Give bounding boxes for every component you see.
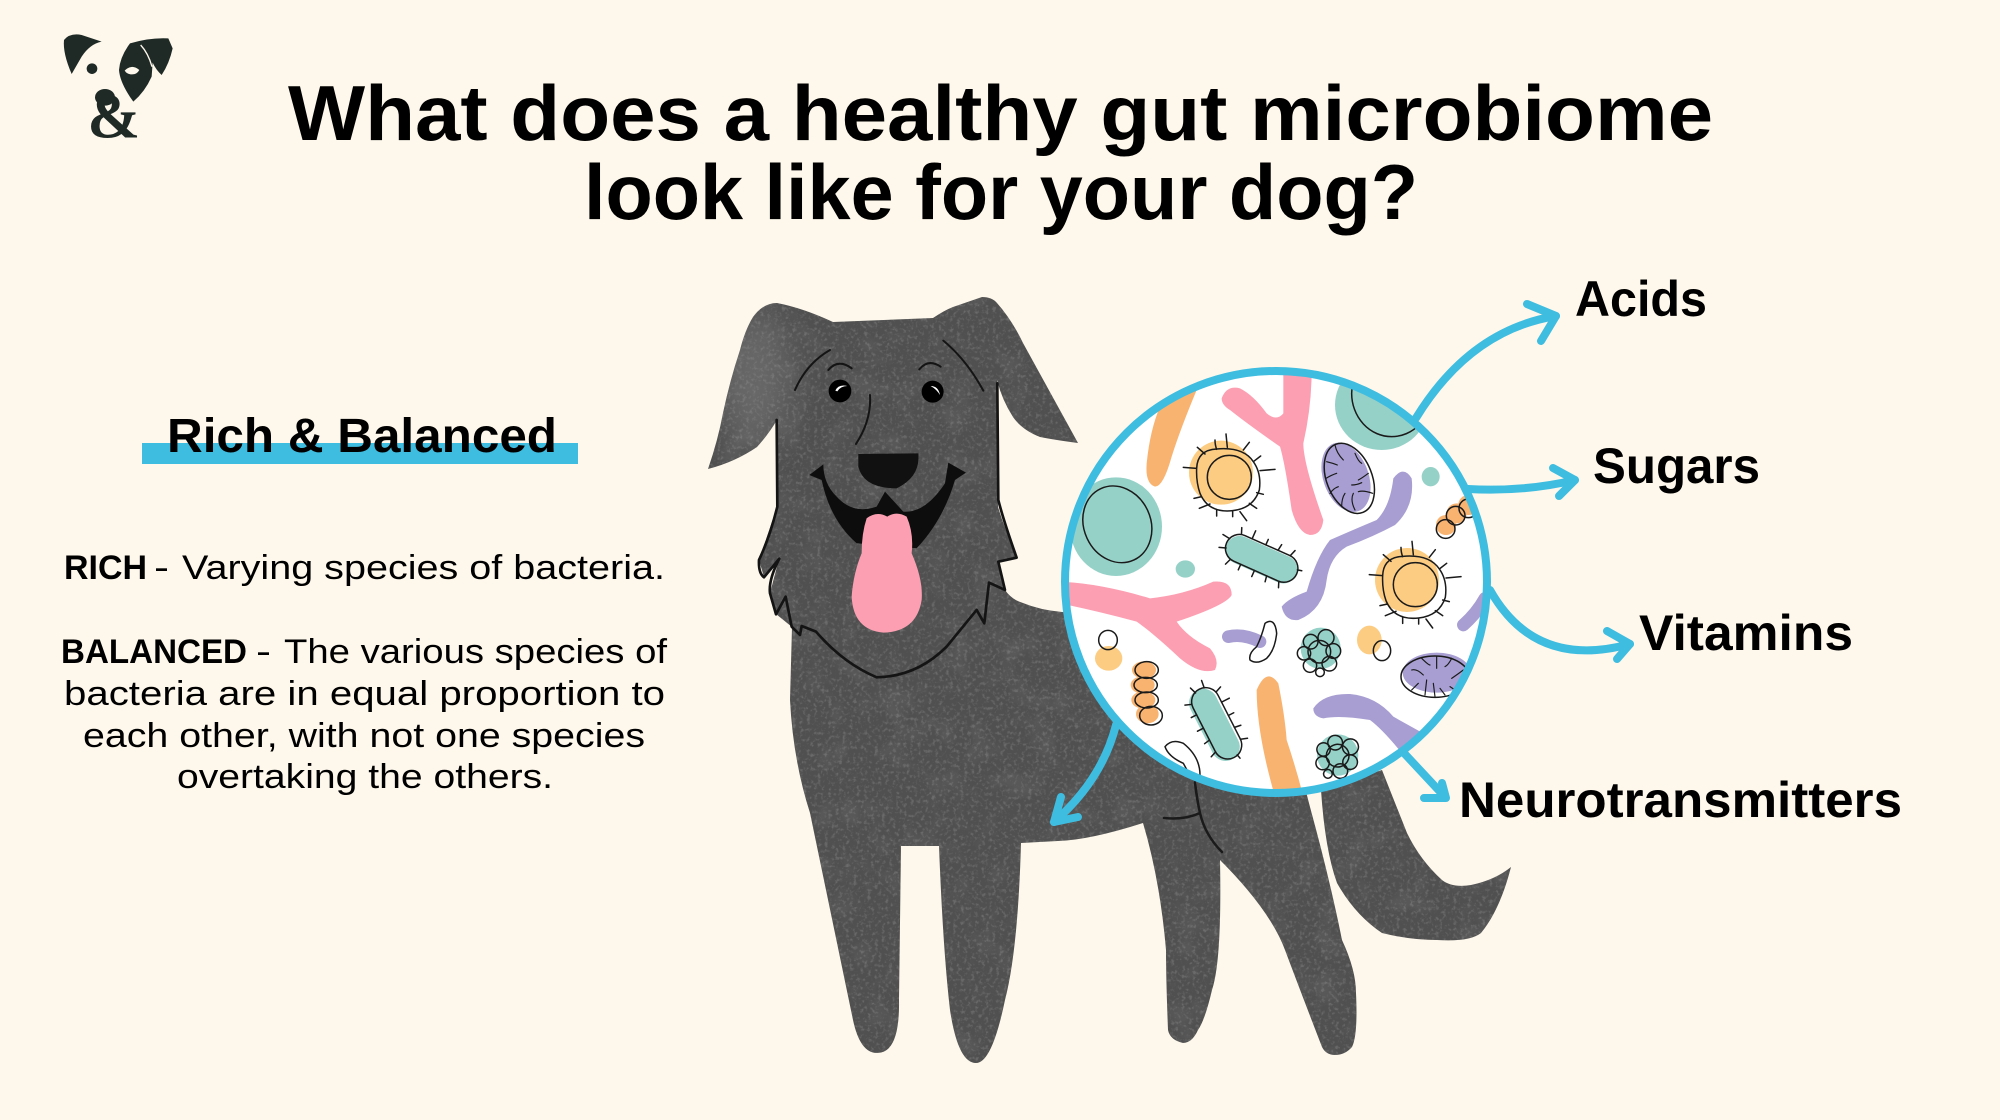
dog hip line [1164, 783, 1222, 852]
arrow: to Acids [1416, 304, 1556, 418]
dog nose [858, 453, 919, 488]
lens white background [1065, 371, 1487, 793]
purple worm [1282, 472, 1412, 620]
logo ear crease [141, 45, 152, 67]
logo eye right [125, 67, 139, 74]
text block: definitions: bacteria are in equal proportion to [64, 675, 665, 713]
teal spiky rod [1218, 526, 1302, 588]
heading underline bar [142, 443, 578, 464]
label: Vitamins: Vitamins [1639, 605, 1853, 661]
purple oval [1321, 442, 1376, 514]
label: Sugars: Sugars [1593, 438, 1760, 494]
dog brow lines [795, 341, 983, 444]
text block: definitions: Varying species of bacteria. [182, 549, 665, 587]
dog body and tail silhouette [690, 280, 1540, 1080]
title: look like for your dog? [584, 148, 1418, 236]
yellow spiky cell [1183, 434, 1275, 521]
logo ampersand: & [87, 81, 140, 151]
text block: definitions: each other, with not one species [83, 717, 645, 755]
bacteria [1060, 350, 1485, 797]
logo eye left [87, 63, 97, 74]
label: Acids: Acids [1575, 271, 1707, 327]
orange rod bottom [1256, 676, 1301, 789]
teal cluster [1297, 628, 1341, 677]
title: What does a healthy gut microbiome [288, 69, 1713, 157]
hip line inside lens edge [1195, 782, 1199, 810]
arrow: to dog gut [1054, 725, 1116, 822]
teal dot right [1422, 467, 1440, 486]
purple right edge [1463, 598, 1485, 625]
text block: definitions: - [256, 633, 271, 671]
purple oval lower right [1401, 653, 1471, 697]
text block: definitions: BALANCED [61, 633, 247, 671]
dog eye right [922, 381, 944, 403]
orange chain lower left [1131, 661, 1162, 725]
capsule outline [1250, 621, 1277, 662]
capsule outline lower [1164, 740, 1201, 775]
teal dot left [1176, 560, 1195, 578]
arrow: to Vitamins [1490, 590, 1630, 659]
teal big cell left [1070, 475, 1164, 576]
arrow: to Sugars [1468, 468, 1575, 496]
logo right eye patch [119, 38, 173, 102]
teal cell top right [1335, 385, 1419, 450]
yellow spiky cell right [1369, 541, 1461, 628]
dog illustration [690, 280, 1540, 1080]
text block: definitions [61, 549, 668, 796]
text block: definitions: overtaking the others. [177, 758, 553, 796]
label: Neurotransmitters: Neurotransmitters [1459, 772, 1902, 828]
lens ring [1065, 371, 1487, 793]
dog fur outline [759, 383, 1017, 677]
yellow dot lower left [1095, 630, 1122, 671]
purple small worm [1228, 636, 1260, 642]
pink Y bacterium top [1222, 370, 1323, 535]
dog face [759, 341, 1017, 677]
title [288, 69, 1713, 236]
dog ear lightening [720, 310, 790, 450]
microbiome lens [1060, 350, 1487, 810]
dog tongue [852, 514, 922, 633]
dog eye left [829, 380, 851, 402]
text block: definitions: The various species of [284, 633, 668, 671]
orange rod top [1146, 390, 1197, 487]
orange chain right [1436, 496, 1473, 540]
logo left ear [64, 34, 102, 74]
text block: definitions: RICH [64, 549, 147, 587]
text block: definitions: - [154, 549, 169, 587]
pink Y bacterium left [1060, 581, 1232, 671]
dog mouth [809, 463, 966, 548]
logo: dog head and ampersand [64, 34, 173, 151]
logo nose [95, 89, 115, 106]
yellow dot with circle [1357, 626, 1391, 661]
teal cluster lower [1315, 734, 1360, 779]
purple worm lower right [1313, 694, 1420, 749]
heading: Rich & Balanced: Rich & Balanced [167, 410, 557, 463]
teal spiky rod lower [1184, 680, 1248, 761]
arrow: to Neurotransmitters [1403, 752, 1446, 798]
